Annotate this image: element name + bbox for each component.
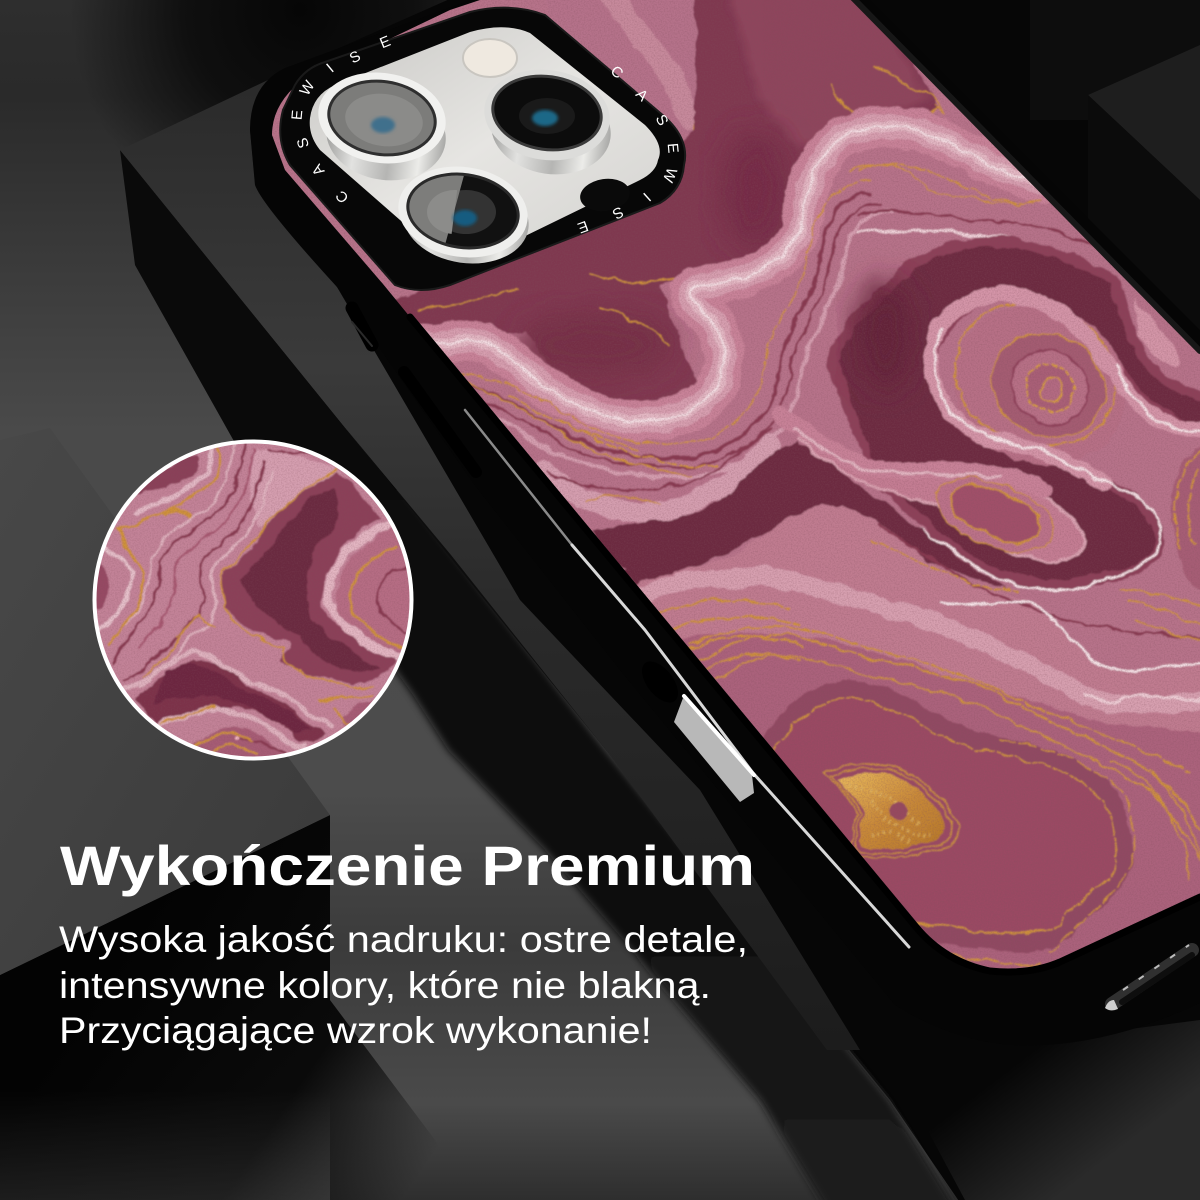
lens: left — [312, 65, 452, 188]
camera frame — [280, 8, 685, 290]
CASEWISE lettering — [289, 33, 681, 236]
body text: Wysoka jakość nadruku: ostre detale, — [59, 919, 748, 960]
case rim highlights and side buttons — [352, 0, 1200, 1010]
CASEWISE lettering: I — [639, 189, 654, 204]
CASEWISE lettering: C — [332, 187, 352, 206]
body text — [59, 919, 748, 1051]
camera glass — [310, 27, 660, 261]
phone case body — [250, 0, 1200, 1045]
CASEWISE lettering: E — [377, 33, 393, 52]
CASEWISE lettering: S — [294, 135, 313, 150]
magnified marble detail circle — [92, 440, 414, 760]
CASEWISE lettering: S — [609, 203, 626, 222]
panel: marble phone back — [272, 0, 1200, 968]
microphone hole — [578, 176, 632, 214]
body text: intensywne kolory, które nie blakną. — [59, 965, 711, 1006]
CASEWISE lettering: E — [664, 142, 681, 154]
CASEWISE lettering: C — [607, 62, 626, 82]
CASEWISE lettering: E — [289, 109, 306, 121]
CASEWISE lettering: E — [575, 217, 590, 236]
body text: Przyciągające wzrok wykonanie! — [59, 1010, 652, 1051]
flash — [463, 39, 517, 77]
CASEWISE lettering: W — [659, 165, 680, 185]
CASEWISE lettering: W — [296, 77, 319, 99]
lens: bottom — [398, 166, 529, 264]
CASEWISE lettering: S — [347, 48, 364, 67]
CASEWISE lettering: S — [652, 112, 671, 129]
lens: right — [478, 62, 617, 182]
CASEWISE lettering: A — [309, 161, 328, 179]
title: Wykończenie Premium — [60, 834, 755, 897]
CASEWISE lettering: I — [323, 61, 337, 76]
camera island — [280, 8, 685, 290]
CASEWISE lettering: A — [632, 86, 651, 105]
charging port — [1105, 945, 1192, 1010]
